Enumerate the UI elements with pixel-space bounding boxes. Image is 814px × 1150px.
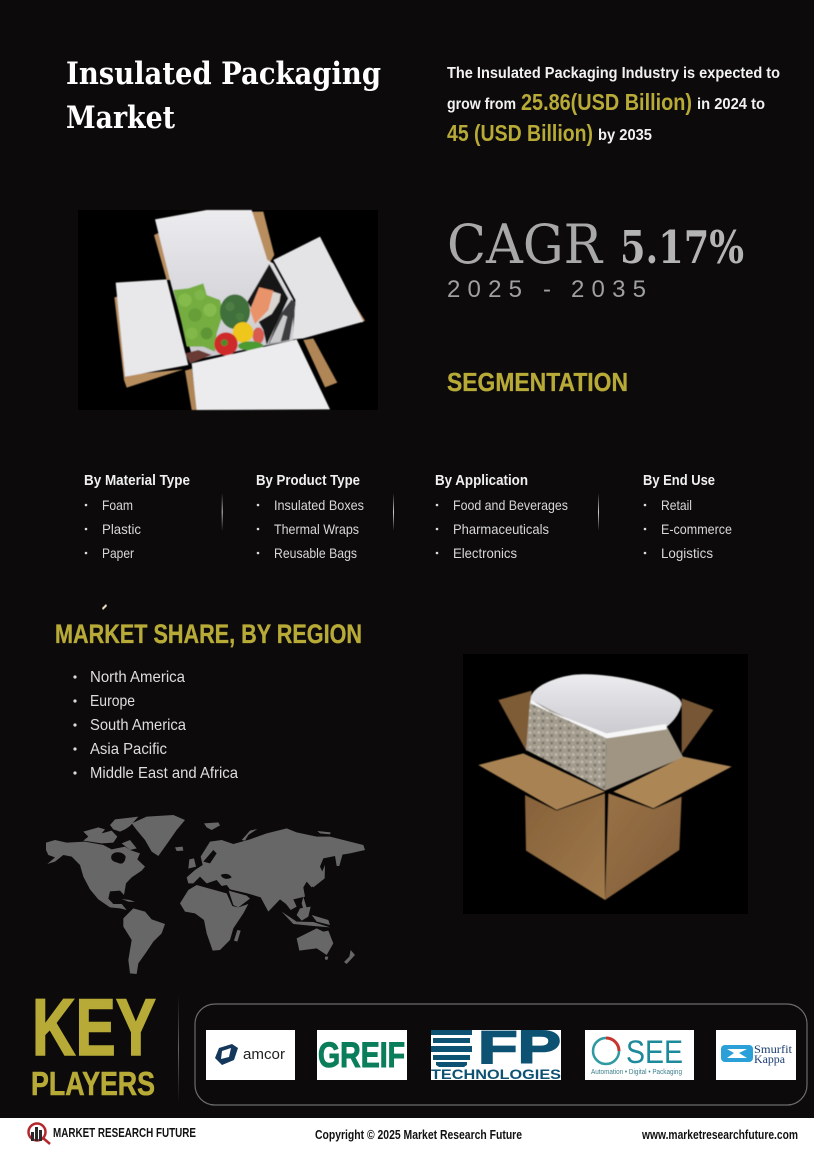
logo: see (585, 1030, 694, 1080)
segment column: application (435, 472, 568, 561)
region list: Asia Pacific (90, 741, 167, 758)
title: Market (66, 100, 176, 136)
footer logo icon (28, 1124, 50, 1144)
heading: segmentation: SEGMENTATION (447, 367, 628, 397)
key players heading: KEY (32, 983, 156, 1073)
segment column: application: By Application (435, 472, 528, 489)
small stray mark (102, 604, 107, 610)
seafood tray (247, 264, 296, 345)
heading: market share by region: MARKET SHARE, BY REGION (55, 619, 362, 649)
segment column: end use: Retail (661, 497, 692, 513)
CAGR figure: - (543, 276, 551, 303)
CAGR figure: CAGR (447, 213, 603, 276)
madagascar (234, 930, 241, 942)
meat (185, 350, 212, 363)
new zealand (344, 950, 355, 964)
CAGR figure (447, 213, 744, 303)
segment column: application: Pharmaceuticals (453, 521, 549, 537)
world map (46, 815, 365, 974)
logo: smurfit kappa: Smurfit (754, 1042, 793, 1056)
logo: amcor (206, 1030, 295, 1080)
market size summary: The Insulated Packaging Industry is expected to (447, 65, 780, 82)
bottom flap (192, 339, 330, 410)
logo: ufp technologies: FP (478, 1021, 561, 1073)
tomato (253, 327, 264, 344)
segment column: end use: Logistics (661, 545, 713, 561)
segment column: end use (643, 472, 732, 561)
segment column: product type: Reusable Bags (274, 545, 357, 561)
region list: Middle East and Africa (90, 765, 238, 782)
australia (297, 928, 333, 955)
segment column: end use: E-commerce (661, 521, 732, 537)
lemon (233, 322, 253, 343)
segment column: product type: Insulated Boxes (274, 497, 364, 513)
region list: North America (90, 669, 185, 686)
logo: amcor: amcor (243, 1046, 285, 1063)
market size summary: 25.86(USD Billion) (521, 89, 692, 115)
segment column: application: Electronics (453, 545, 517, 561)
broccoli (220, 294, 250, 329)
copyright: Copyright © 2025 Market Research Future (315, 1128, 522, 1142)
north america (46, 840, 145, 910)
region list (73, 669, 238, 782)
green pepper (238, 341, 263, 351)
logo: smurfit kappa (716, 1030, 796, 1080)
logo: smurfit kappa: Kappa (754, 1052, 786, 1066)
iceland (175, 847, 183, 851)
footer brand name: MARKET RESEARCH FUTURE (53, 1126, 196, 1140)
segment column: material type (84, 472, 190, 561)
europe and asia (187, 828, 365, 912)
lettuce (173, 283, 223, 352)
british isles (188, 858, 196, 869)
arabian peninsula (229, 891, 250, 907)
CAGR figure: 5.17% (620, 221, 744, 274)
title (66, 56, 381, 136)
photo: insulated box with food, top view (78, 210, 378, 410)
segment column: material type: Foam (102, 497, 133, 513)
svalbard (204, 822, 220, 830)
canadian arctic islands (83, 817, 138, 850)
maritime southeast asia (282, 912, 330, 927)
logo: ufp technologies (431, 1021, 561, 1082)
red pepper (214, 332, 238, 356)
key players panel (195, 1004, 807, 1105)
segment column: material type: Paper (102, 545, 134, 561)
market size summary: 45 (USD Billion) (447, 120, 593, 146)
segment column: application: Food and Beverages (453, 497, 568, 513)
logo: see: Automation • Digital • Packaging (591, 1069, 682, 1076)
sakhalin (337, 854, 343, 866)
segment column: material type: Plastic (102, 521, 141, 537)
key players heading: PLAYERS (31, 1065, 155, 1102)
segment column: material type: By Material Type (84, 472, 190, 489)
logo: greif (317, 1030, 407, 1080)
segment column: product type: Thermal Wraps (274, 521, 359, 537)
africa (180, 885, 248, 951)
footer bar (0, 1118, 814, 1150)
photo: cardboard box with foil liner (463, 654, 748, 914)
region list: Europe (90, 693, 135, 710)
segment column: product type: By Product Type (256, 472, 360, 489)
logo: ufp technologies: TECHNOLOGIES (431, 1066, 561, 1082)
caribbean (122, 899, 135, 902)
south america (123, 908, 165, 974)
japan (312, 865, 325, 887)
greenland (132, 815, 185, 856)
market size summary: grow from (447, 96, 516, 113)
CAGR figure: 2035 (571, 276, 646, 303)
region list: South America (90, 717, 186, 734)
market size summary: by 2035 (598, 127, 652, 144)
segment column: end use: By End Use (643, 472, 715, 489)
severnaya zemlya (317, 831, 331, 834)
baltic gap (203, 850, 217, 863)
logo: greif: GREIF (318, 1036, 405, 1075)
market size summary: in 2024 to (697, 96, 765, 113)
market size summary (447, 65, 780, 146)
novaya zemlya (242, 829, 257, 841)
title: Insulated Packaging (66, 56, 381, 92)
segment column: product type (256, 472, 364, 561)
key players heading (31, 983, 156, 1102)
logo: see: SEE (626, 1034, 683, 1070)
CAGR figure: 2025 (447, 276, 522, 303)
